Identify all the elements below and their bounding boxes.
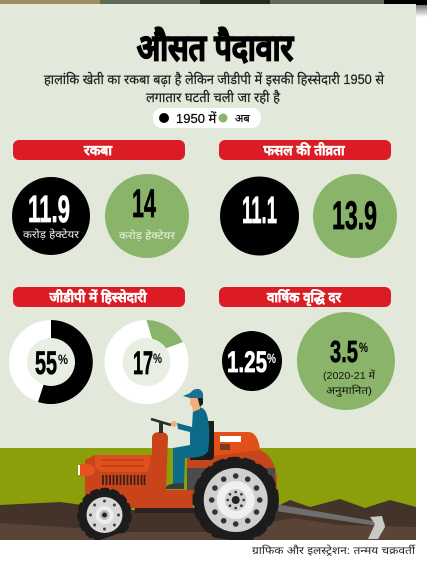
circle: 1950 value 1.25 percent: %: [267, 350, 276, 366]
circle: current value 3.5 percent: (2020-21 में: [323, 369, 376, 382]
heading: rakba: रकबा: [83, 142, 113, 158]
heading: GDP share: जीडीपी में हिस्सेदारी: [49, 289, 148, 305]
donut: 55 percent: [9, 320, 93, 404]
circle: 1950 value 1.25 percent: [222, 331, 282, 391]
donut: 17 percent: %: [153, 350, 162, 366]
circle: current value 3.5 percent: अनुमानित): [326, 384, 372, 397]
circle: 1950 value 11.9: [12, 177, 90, 255]
circle: current value 3.5 percent: 3.5: [330, 334, 358, 369]
subtitle: हालांकि खेती का रकबा बढ़ा है लेकिन जीडीपी में इसकी हिस्सेदारी 1950 से: [44, 71, 385, 87]
background panel: [0, 4, 416, 449]
circle: current value 3.5 percent: [297, 312, 395, 410]
heading: annual growth: वार्षिक वृद्धि दर: [266, 289, 342, 307]
heading: rakba: [13, 140, 185, 160]
donut: 17 percent: 17: [133, 345, 153, 381]
heading: crop intensity: फसल की तीव्रता: [263, 142, 346, 158]
donut: 17 percent: [104, 320, 188, 404]
circle: 1950 value 11.9: करोड़ हेक्टेयर: [23, 228, 80, 241]
farmer torso and arm: [177, 407, 209, 452]
plough: [275, 504, 385, 539]
large rear wheel: [193, 458, 278, 542]
tractor body and steering column: [85, 432, 193, 508]
circle: current value 14: 14: [132, 182, 156, 226]
panel: annual growth: [219, 287, 395, 410]
circle: current value 13.9: 13.9: [332, 194, 377, 238]
farmer head and cap: [190, 396, 200, 412]
tractor rear fender: [187, 432, 277, 500]
legend: 1950 में: [176, 111, 217, 126]
panel: crop intensity: [219, 140, 397, 258]
heading: crop intensity: [219, 140, 391, 160]
circle: 1950 value 11.1: [220, 176, 299, 256]
circle: current value 14: [105, 174, 189, 258]
top photo strip: [0, 0, 427, 17]
heading: GDP share: [13, 287, 185, 307]
circle: 1950 value 1.25 percent: 1.25: [227, 346, 267, 379]
circle: current value 14: करोड़ हेक्टेयर: [119, 229, 176, 242]
panel: GDP share: [9, 287, 188, 404]
legend: [153, 108, 261, 128]
heading: annual growth: [219, 287, 391, 307]
circle: current value 13.9: [313, 174, 397, 258]
title: औसत पैदावार: [137, 27, 294, 68]
circle: 1950 value 11.9: 11.9: [28, 189, 70, 231]
headlight: [80, 464, 95, 476]
small front wheel: [78, 488, 131, 542]
tractor: [78, 389, 278, 542]
circle: 1950 value 11.1: 11.1: [242, 190, 277, 232]
foreground soil mounds: [100, 530, 300, 540]
farmer legs: [173, 445, 207, 484]
seat: [190, 421, 214, 460]
circle: current value 3.5 percent: %: [359, 339, 368, 355]
farmer: [166, 389, 209, 489]
steering wheel: [151, 419, 171, 433]
engine vent: [103, 475, 144, 485]
donut: 55 percent: %: [58, 351, 68, 367]
field and soil: [0, 448, 416, 540]
donut: 55 percent: 55: [35, 345, 57, 381]
legend: अब: [235, 113, 250, 125]
subtitle: [44, 71, 385, 105]
panel: rakba: [12, 140, 189, 258]
credit: ग्राफिक और इलस्ट्रेशन: तन्मय चक्रवर्ती: [252, 544, 416, 557]
subtitle: लगातार घटती चली जा रही है: [146, 89, 281, 105]
